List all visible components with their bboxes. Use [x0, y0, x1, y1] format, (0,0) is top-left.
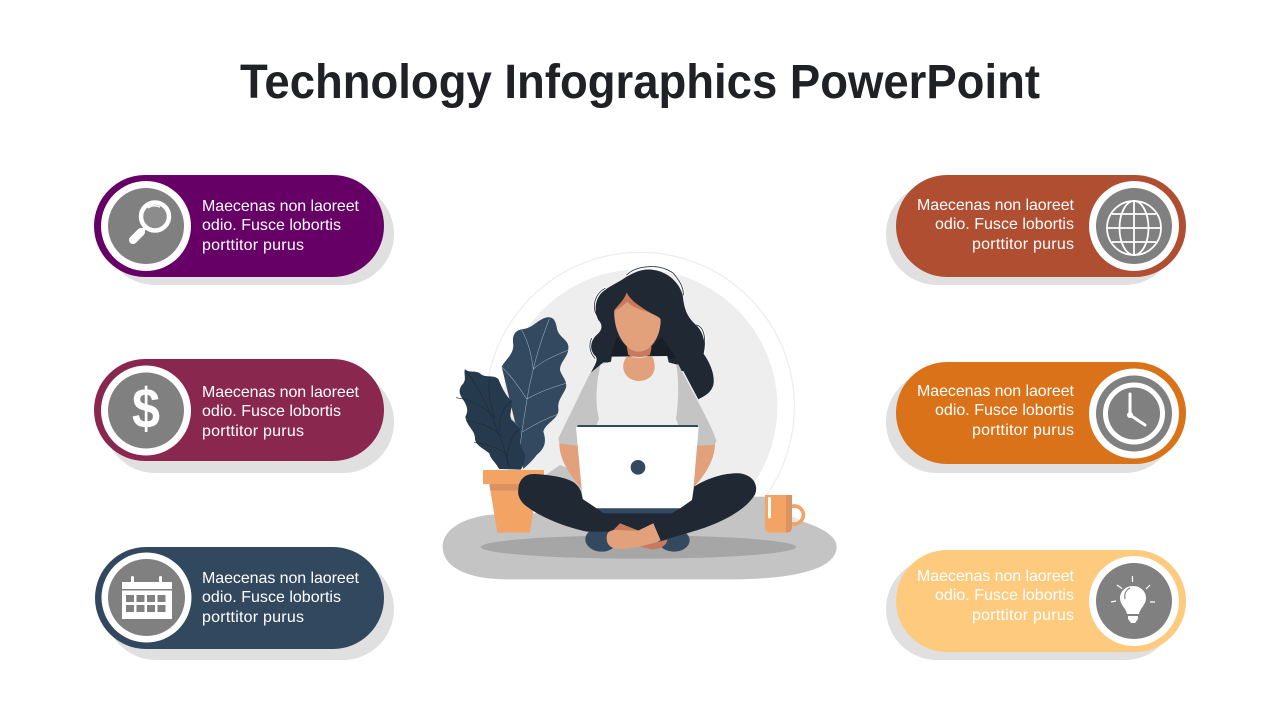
text: odio. Fusce lobortis [935, 402, 1074, 419]
pill [896, 362, 1186, 464]
text: odio. Fusce lobortis [202, 589, 341, 606]
text: porttitor purus [202, 423, 304, 440]
card shadow [886, 371, 1176, 473]
icon: clock [1089, 368, 1179, 458]
text: odio. Fusce lobortis [202, 403, 341, 420]
sleeves [558, 362, 717, 446]
floor [443, 465, 837, 579]
icon: globe [1089, 181, 1179, 271]
icon: calendar [102, 552, 192, 642]
back leaf [502, 317, 568, 469]
pot [483, 470, 544, 533]
hair shade by neck [610, 337, 677, 358]
card shadow [886, 183, 1176, 285]
floor shadow [481, 535, 796, 559]
text: Maecenas non laoreet [917, 197, 1075, 214]
card 4: globe [886, 175, 1186, 285]
hands [607, 523, 667, 549]
icon: dollar: $ [132, 377, 160, 441]
text [917, 197, 1075, 253]
text: Maecenas non laoreet [917, 568, 1075, 585]
laptop base [597, 508, 680, 513]
text: Maecenas non laoreet [202, 384, 360, 401]
card shadow [104, 371, 394, 473]
card 1: search [94, 175, 394, 285]
pill [94, 359, 384, 461]
face [614, 302, 660, 352]
text [202, 384, 360, 440]
text [202, 570, 360, 626]
card 2: finance [94, 359, 394, 473]
arms [559, 443, 715, 490]
legs [518, 473, 756, 541]
text: Maecenas non laoreet [202, 198, 360, 215]
text [917, 568, 1075, 624]
front leaf veins [456, 371, 521, 469]
card 5: clock [886, 362, 1186, 473]
pill [95, 547, 384, 649]
plant [456, 317, 568, 533]
front leaf [460, 369, 525, 470]
icon: magnifier [101, 181, 191, 271]
hair outline [590, 267, 705, 358]
background circle [486, 252, 794, 561]
pill [94, 175, 384, 277]
woman [518, 267, 756, 552]
card 3: calendar [95, 547, 394, 660]
card shadow [104, 183, 394, 285]
back leaf veins [502, 319, 568, 447]
icon: light bulb [1089, 556, 1179, 646]
text [917, 383, 1075, 439]
text: porttitor purus [972, 236, 1074, 253]
text: odio. Fusce lobortis [202, 217, 341, 234]
text: porttitor purus [972, 422, 1074, 439]
mug [765, 495, 803, 533]
neck shadow [627, 347, 652, 357]
card shadow [886, 558, 1176, 660]
hairline [614, 292, 661, 325]
icon: dollar [101, 366, 191, 456]
neck [623, 356, 655, 381]
shirt [597, 356, 678, 425]
text: porttitor purus [972, 607, 1074, 624]
feet [585, 527, 690, 552]
laptop [576, 425, 699, 508]
title: Technology Infographics PowerPoint [240, 56, 1040, 109]
text: Maecenas non laoreet [917, 383, 1075, 400]
text: porttitor purus [202, 237, 304, 254]
pill [896, 550, 1186, 652]
hair [590, 270, 714, 399]
text: porttitor purus [202, 609, 304, 626]
central illustration: woman with laptop [443, 252, 837, 579]
text: odio. Fusce lobortis [935, 216, 1074, 233]
text: Maecenas non laoreet [202, 570, 360, 587]
text [202, 198, 360, 254]
card shadow [105, 558, 394, 660]
pill [896, 175, 1186, 277]
card 6: idea [886, 550, 1186, 660]
text: odio. Fusce lobortis [935, 587, 1074, 604]
